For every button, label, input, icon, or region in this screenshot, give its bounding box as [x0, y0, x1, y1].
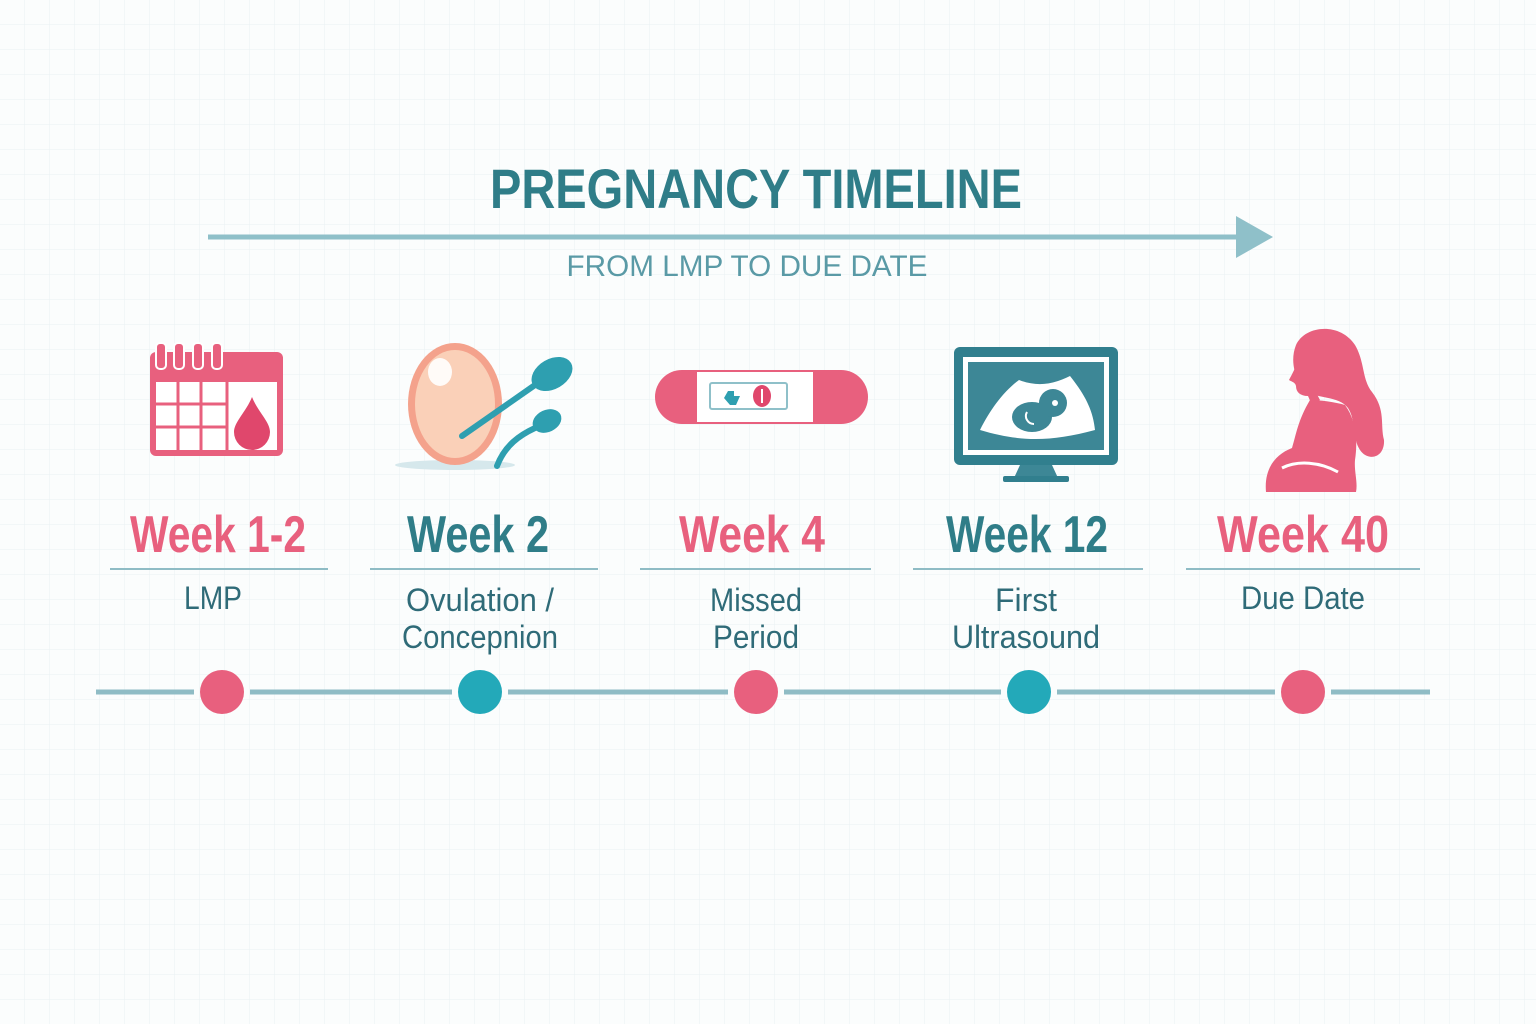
subtitle: FROM LMP TO DUE DATE: [566, 250, 928, 283]
icon: calendar with blood drop: [150, 343, 283, 456]
icon: egg and sperm: [395, 343, 579, 470]
week label: Week 2: Concepnion: [402, 619, 558, 655]
week label: Week 12: [913, 506, 1143, 655]
week label: Week 4: [640, 506, 871, 655]
week label: Week 1-2: LMP: [184, 580, 242, 616]
week label: Week 40: Week 40: [1217, 506, 1389, 564]
week label: Week 4: Missed: [710, 582, 802, 618]
icon: pregnant woman: [1266, 329, 1384, 492]
week label: Week 1-2: [110, 506, 328, 616]
week label: Week 4: Period: [713, 619, 799, 655]
week label: Week 12: Week 12: [946, 506, 1108, 564]
week label: Week 4: Week 4: [679, 506, 825, 564]
week label: Week 2: Ovulation /: [406, 582, 554, 618]
arrow: timeline direction: [208, 216, 1273, 258]
week label: Week 12: First: [995, 582, 1057, 618]
title: PREGNANCY TIMELINE: [490, 157, 1022, 220]
hair: [1293, 329, 1384, 457]
face: [1289, 358, 1320, 405]
week label: Week 2: Week 2: [407, 506, 549, 564]
icon: ultrasound monitor: [954, 347, 1118, 482]
timeline with milestone dots: [96, 670, 1430, 714]
week label: Week 40: [1186, 506, 1420, 616]
icon: pregnancy test: [655, 370, 868, 424]
body: [1266, 400, 1357, 492]
week label: Week 40: Due Date: [1241, 580, 1365, 616]
week label: Week 1-2: Week 1-2: [130, 506, 306, 564]
week label: Week 12: Ultrasound: [952, 619, 1100, 655]
week label: Week 2: [370, 506, 598, 655]
